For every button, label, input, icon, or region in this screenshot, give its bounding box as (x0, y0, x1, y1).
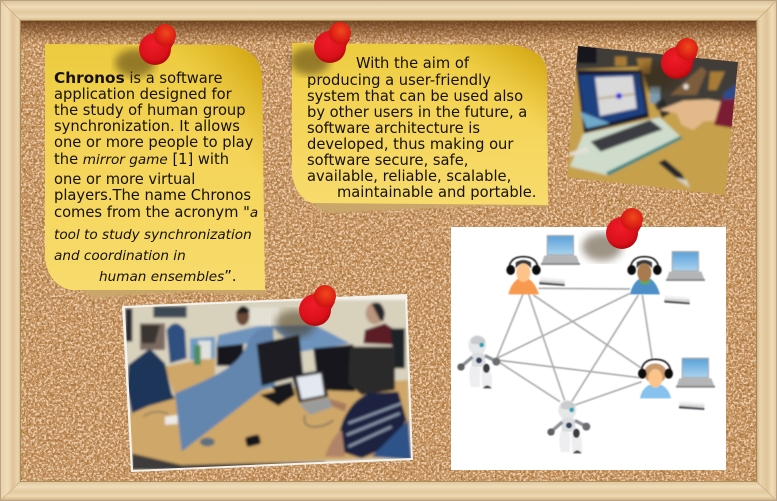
right person (348, 347, 395, 395)
laptop icon 2 (666, 251, 705, 281)
note paper (45, 44, 265, 290)
pin: second note (290, 22, 351, 75)
note text: one or more people to play (54, 134, 254, 151)
note paper (292, 43, 548, 205)
note text: one or more virtual (54, 171, 195, 188)
note text: available, reliable, scalable, (307, 168, 511, 185)
photo: people at desks playing the mirror game (122, 294, 415, 473)
left person (127, 348, 175, 413)
note text: Chronos is a software (54, 69, 223, 87)
laptop screen (576, 70, 649, 133)
robot player 1 (457, 335, 500, 388)
panel: sticky note Chronos description (45, 44, 266, 298)
robot player 2 (547, 400, 590, 453)
note text: the mirror game [1] with (54, 151, 229, 168)
motion sensor 2 (664, 296, 690, 304)
motion sensor 3 (679, 401, 704, 410)
note text: synchronization. It allows (54, 118, 240, 135)
note text: software architecture is (307, 120, 480, 137)
chair and screens at back (167, 323, 187, 363)
hand (659, 99, 722, 130)
note text: and coordination in (54, 248, 186, 264)
note text: With the aim of (356, 55, 470, 72)
pin: first note (115, 24, 176, 77)
desk (128, 380, 410, 467)
note text: software secure, safe, (307, 152, 468, 169)
pin: network panel (582, 208, 643, 261)
note text: developed, thus making our (307, 136, 514, 153)
phone and cups (245, 434, 261, 447)
note text: tool to study synchronization (54, 227, 252, 243)
person: blue with headphones (627, 257, 662, 294)
background people (236, 307, 249, 325)
note text: players.The name Chronos (54, 187, 251, 204)
monitors (257, 334, 303, 386)
laptop (292, 370, 328, 403)
network links (497, 288, 652, 405)
note text: maintainable and portable. (337, 184, 536, 201)
panel: sticky note software architecture (292, 43, 548, 213)
note text: producing a user-friendly (307, 72, 491, 89)
note text: application designed for (54, 86, 233, 103)
laptop icon 1 (541, 235, 580, 265)
usb device on desk (658, 158, 686, 180)
laptop base (570, 117, 682, 175)
photo: laptop running Chronos with pointing hand (567, 46, 738, 195)
laptop icon 3 (676, 358, 715, 388)
note text: the study of human group (54, 102, 246, 119)
note text: system that can be used also (307, 88, 523, 105)
motion sensor 1 (539, 277, 565, 286)
panel: network diagram of players (451, 227, 726, 470)
blue divider (217, 325, 350, 352)
note text: human ensembles”. (99, 268, 237, 285)
note text: comes from the acronym "a (54, 204, 258, 221)
person: orange with headphones (506, 257, 541, 294)
note text: by other users in the future, a (307, 104, 527, 121)
pin: desk photo (275, 285, 336, 338)
note shadow layer (72, 282, 266, 298)
note shadow layer (312, 198, 548, 213)
person: light blue with headphones (638, 359, 673, 398)
pin: laptop photo (637, 38, 698, 91)
